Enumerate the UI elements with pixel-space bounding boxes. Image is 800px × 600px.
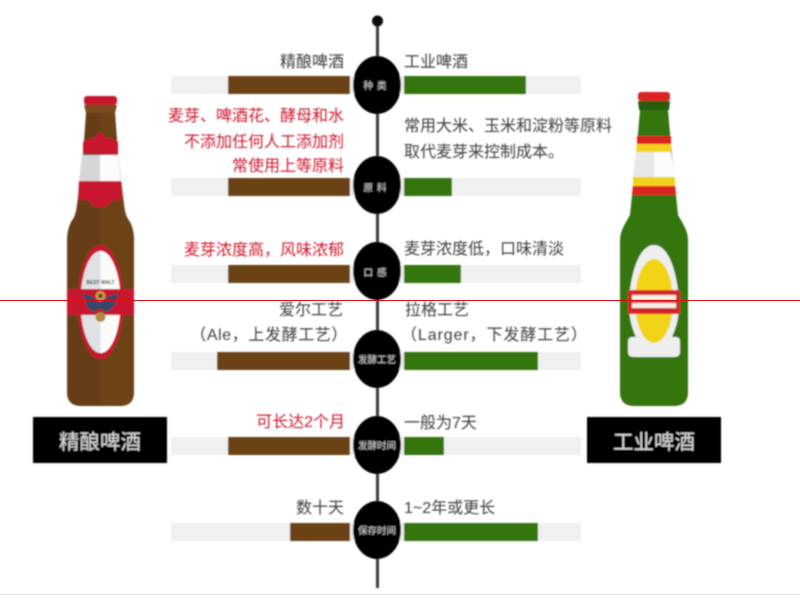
- bottom rule: [0, 594, 800, 595]
- row: 口感: 麦芽浓度低，口味清淡: [404, 240, 564, 258]
- row: 原料: [168, 107, 612, 214]
- row: 口感: 麦芽浓度高，风味浓郁: [184, 241, 344, 259]
- row: 保存时间: 1~2年或更长: [404, 499, 495, 517]
- row: 发酵工艺: （Ale，上发酵工艺）: [190, 326, 348, 344]
- bottle: craft beer: [67, 96, 134, 406]
- label: industrial beer: [587, 417, 721, 463]
- red horizontal line: [0, 300, 800, 301]
- row: 种类: 种类: [363, 80, 391, 92]
- row: 发酵工艺: [171, 301, 588, 388]
- row: 发酵工艺: 爱尔工艺: [279, 301, 343, 319]
- row: 原料: 麦芽、啤酒花、酵母和水: [168, 107, 344, 125]
- row: 种类: [171, 53, 581, 114]
- label: craft beer: [33, 417, 167, 463]
- row: 原料: 常用大米、玉米和淀粉等原料: [404, 117, 612, 135]
- row: 保存时间: [171, 499, 581, 559]
- row: 发酵工艺: 拉格工艺: [405, 301, 469, 319]
- row: 口感: [171, 240, 581, 300]
- icon: skull emblem: [83, 280, 118, 322]
- row: 发酵时间: 发酵时间: [358, 440, 396, 452]
- row: 发酵工艺: （Larger，下发酵工艺）: [401, 326, 588, 344]
- row: 口感: 口感: [363, 267, 391, 279]
- label: industrial beer: 工业啤酒: [613, 431, 695, 454]
- row: 原料: 取代麦芽来控制成本。: [404, 143, 564, 161]
- row: 原料: 不添加任何人工添加剂: [184, 133, 344, 151]
- row: 发酵时间: 一般为7天: [404, 414, 477, 432]
- row: 发酵工艺: 发酵工艺: [358, 354, 396, 366]
- row: 发酵时间: 可长达2个月: [256, 413, 345, 431]
- row: 种类: 精酿啤酒: [280, 53, 344, 71]
- central timeline: [372, 16, 383, 588]
- row: 保存时间: 保存时间: [358, 525, 396, 537]
- row: 原料: 常使用上等原料: [232, 157, 344, 175]
- row: 种类: 工业啤酒: [404, 53, 468, 71]
- icon: skull emblem: BEST MALT: [86, 280, 115, 286]
- row: 原料: 原料: [363, 182, 391, 194]
- label: craft beer: 精酿啤酒: [59, 431, 141, 454]
- row: 保存时间: 数十天: [296, 499, 344, 517]
- row: 发酵时间: [171, 413, 581, 474]
- bottle: industrial beer: [620, 92, 688, 406]
